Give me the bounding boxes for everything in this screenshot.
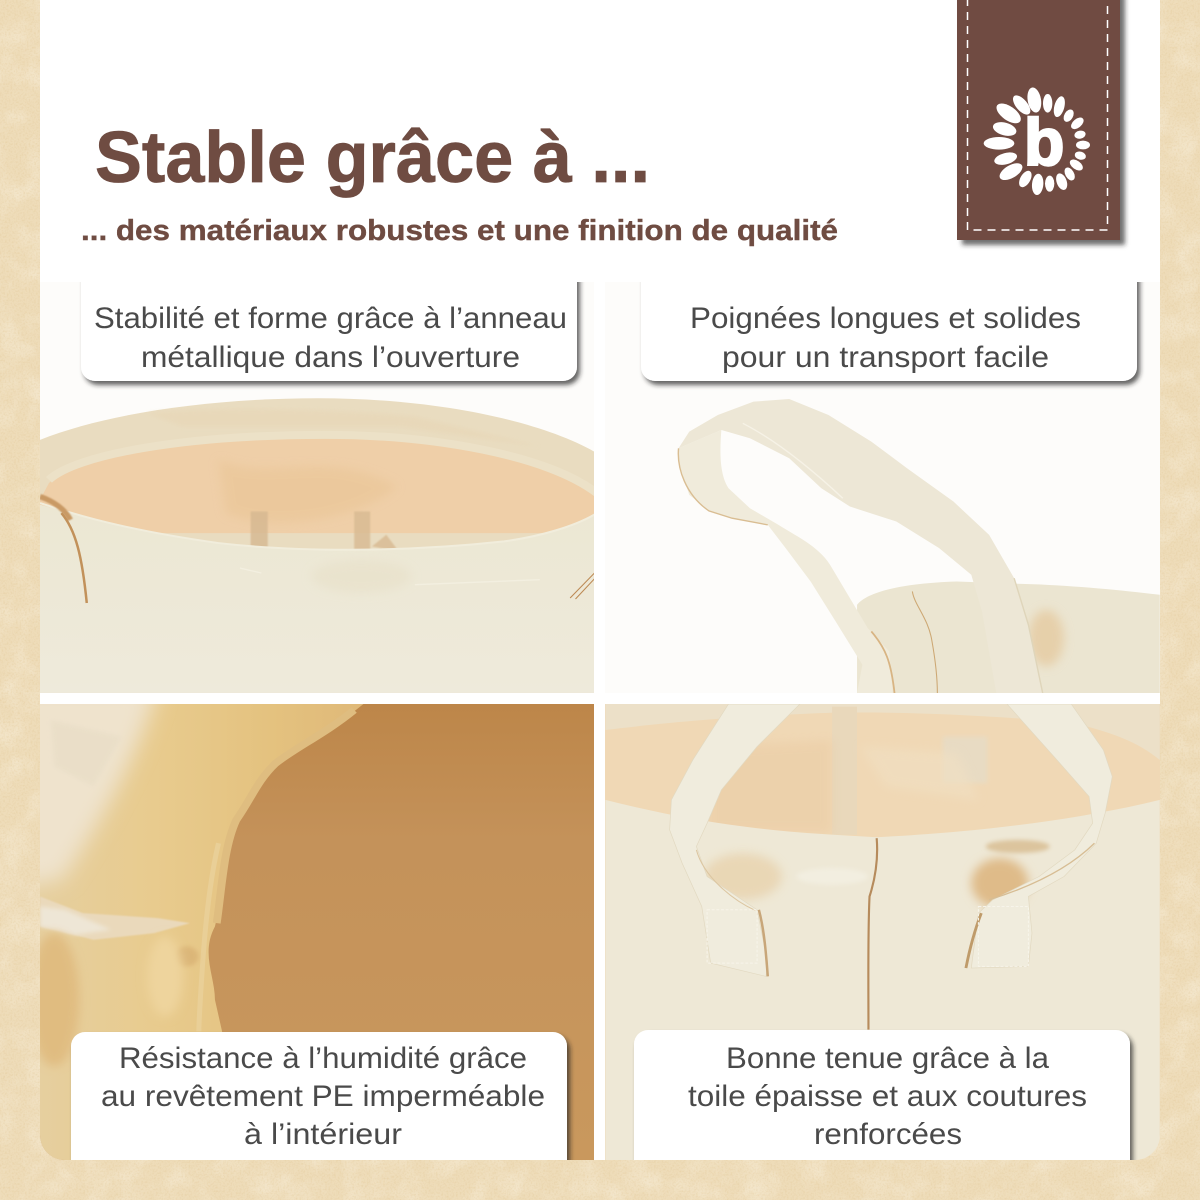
callout: moisture resistance: Résistance à l’humidité grâce bbox=[119, 1042, 527, 1075]
callout: handles bbox=[641, 272, 1137, 381]
callout: moisture resistance: à l’intérieur bbox=[244, 1118, 402, 1151]
photo: metal ring opening bbox=[40, 398, 594, 693]
callout: metal ring: Stabilité et forme grâce à l’anneau bbox=[94, 302, 567, 335]
icon: sunflower logo bbox=[984, 86, 1090, 195]
callout: thick canvas: toile épaisse et aux coutures bbox=[688, 1080, 1087, 1113]
callout: thick canvas: Bonne tenue grâce à la bbox=[726, 1042, 1049, 1075]
callout: handles: Poignées longues et solides bbox=[690, 302, 1081, 335]
callout: metal ring bbox=[81, 272, 577, 381]
callout: moisture resistance: au revêtement PE imperméable bbox=[101, 1080, 545, 1113]
callout: handles: pour un transport facile bbox=[722, 341, 1049, 374]
subtitle: ... des matériaux robustes et une finition de qualité bbox=[81, 215, 838, 247]
photo: long handle bbox=[678, 399, 1160, 693]
photo: waterproof PE coating bbox=[11, 687, 594, 1166]
photo: thick canvas and reinforced seams bbox=[605, 704, 1160, 1166]
icon: sunflower logo: b bbox=[1024, 105, 1064, 179]
brand tag with logo bbox=[957, 0, 1120, 240]
title: Stable grâce à ... bbox=[95, 118, 650, 198]
callout: metal ring: métallique dans l’ouverture bbox=[141, 341, 520, 374]
callout: moisture resistance bbox=[70, 1032, 574, 1160]
callout: thick canvas bbox=[634, 1030, 1136, 1160]
callout: thick canvas: renforcées bbox=[814, 1118, 962, 1151]
